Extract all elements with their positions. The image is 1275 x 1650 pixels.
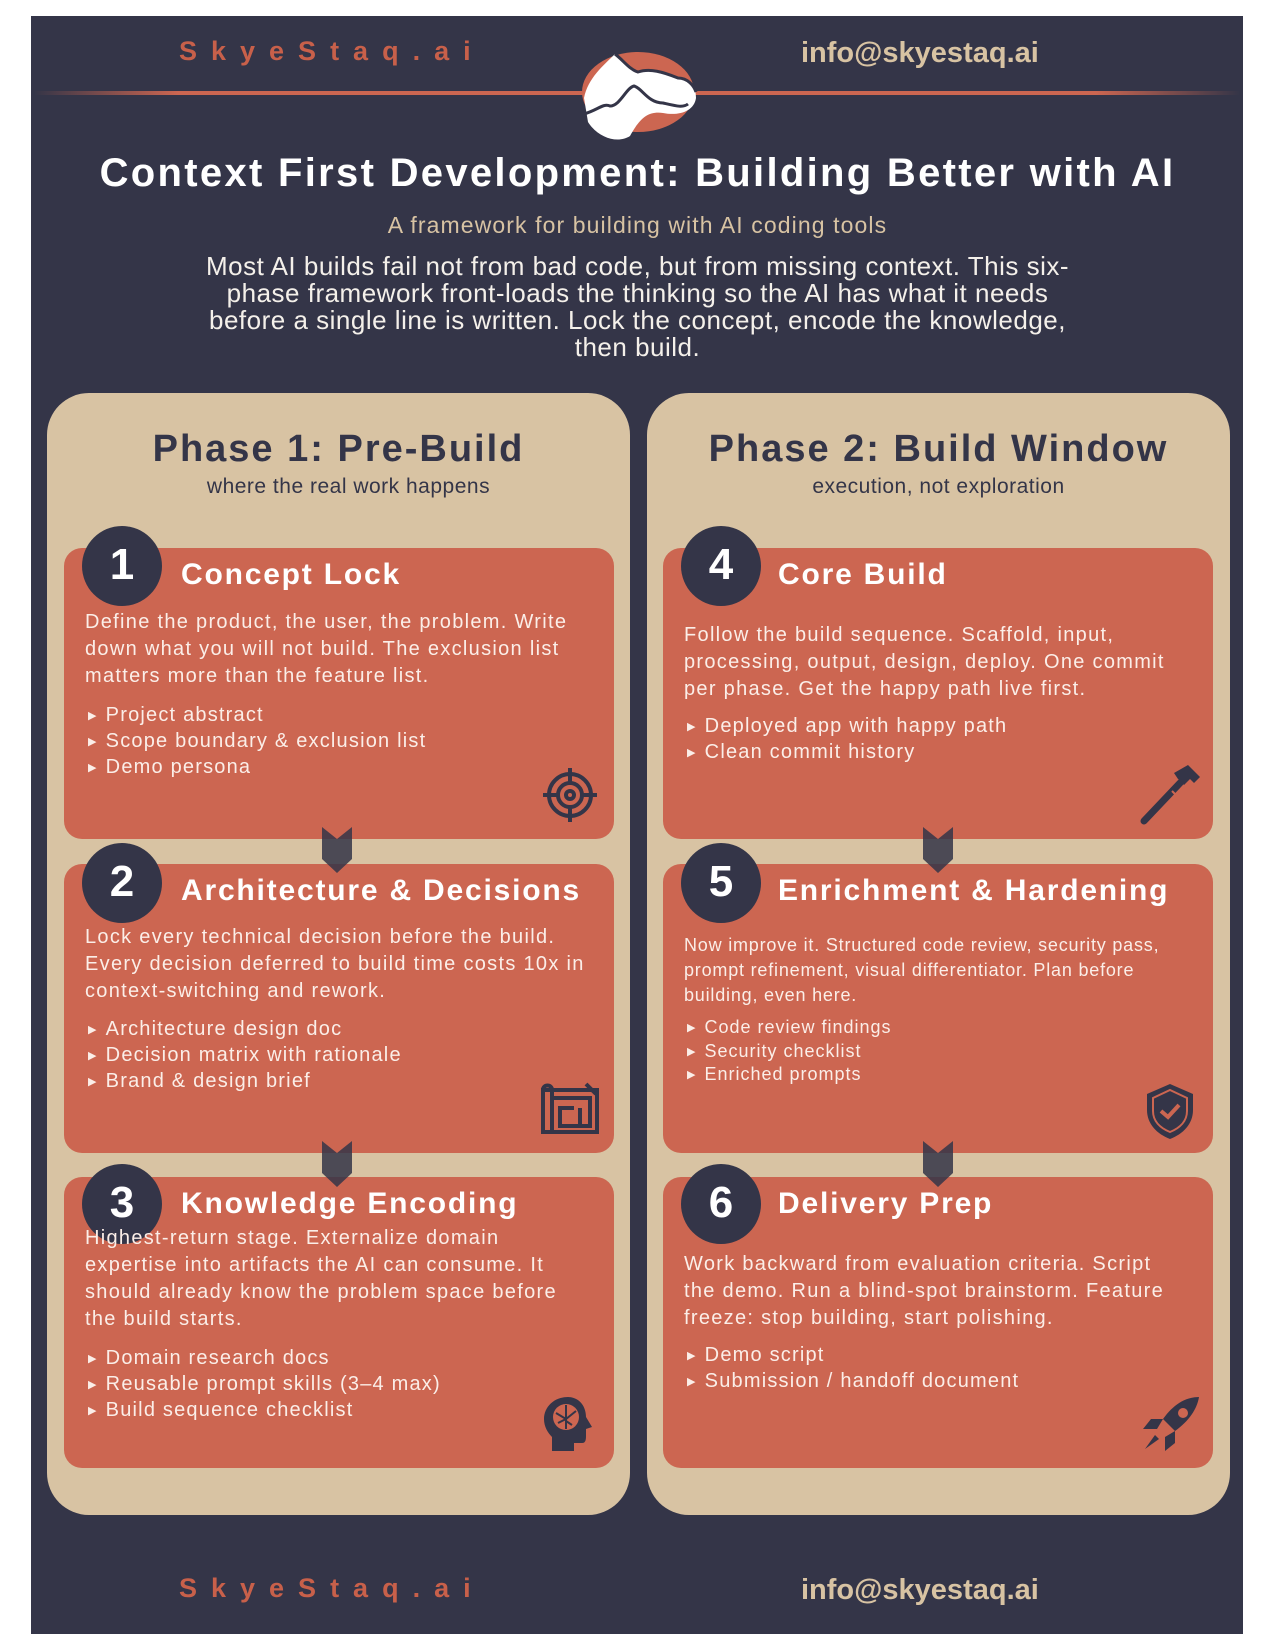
body 4 [684, 624, 1165, 700]
circle 2: 2 [110, 857, 134, 906]
body 1 [85, 611, 567, 687]
card 4 [663, 548, 1213, 839]
bullets 5: ▶ Code review findings [687, 1017, 892, 1037]
body 3 [85, 1227, 557, 1330]
intro paragraph: before a single line is written. Lock the concept, encode the knowledge, [209, 305, 1066, 335]
bullets 2: ▶ Brand & design brief [88, 1070, 311, 1092]
phase 1 title: Phase 1: Pre-Build [153, 428, 524, 470]
phase 1 subtitle: where the real work happens [207, 475, 490, 498]
icon: shield [1147, 1084, 1193, 1139]
intro paragraph [206, 251, 1069, 362]
body 2: context-switching and rework. [85, 980, 386, 1002]
bullets 6: ▶ Demo script [687, 1344, 825, 1366]
body 2: Lock every technical decision before the build. [85, 926, 555, 948]
body 3: the build starts. [85, 1308, 243, 1330]
bullets 1: ▶ Demo persona [88, 756, 251, 778]
card 5 [663, 864, 1213, 1153]
icon: rocket [1143, 1397, 1199, 1451]
body 2 [85, 926, 585, 1002]
icon: blueprint [541, 1082, 599, 1134]
panel: phase 2 [647, 393, 1230, 1515]
circle 5: 5 [709, 857, 733, 906]
body 6: Work backward from evaluation criteria. Script [684, 1253, 1151, 1275]
body 4: per phase. Get the happy path live first. [684, 678, 1086, 700]
body 1: down what you will not build. The exclusion list [85, 638, 559, 660]
circle 2 [82, 843, 162, 923]
icon: brain head [544, 1397, 592, 1451]
circle 1: 1 [110, 540, 134, 589]
card 1 [64, 548, 614, 839]
body 5 [684, 935, 1159, 1005]
card 6 [663, 1177, 1213, 1468]
bullets 2 [88, 1018, 402, 1092]
body 3: should already know the problem space before [85, 1281, 557, 1303]
body 5: Now improve it. Structured code review, security pass, [684, 935, 1159, 955]
body 1: Define the product, the user, the problem. Write [85, 611, 567, 633]
bullets 1: ▶ Scope boundary & exclusion list [88, 730, 426, 752]
arrow: 1 to 2 [322, 827, 352, 873]
phase 2 title: Phase 2: Build Window [709, 428, 1168, 470]
bullets 2: ▶ Architecture design doc [88, 1018, 342, 1040]
title 6: Delivery Prep [778, 1187, 993, 1220]
circle 3: 3 [110, 1178, 134, 1227]
card 3 [64, 1177, 614, 1468]
body 5: building, even here. [684, 985, 857, 1005]
header brand: SkyeStaq.ai [179, 36, 485, 66]
intro paragraph: phase framework front-loads the thinking so the AI has what it needs [227, 278, 1048, 308]
body 6: freeze: stop building, start polishing. [684, 1307, 1054, 1329]
header line [34, 91, 1240, 95]
subtitle: A framework for building with AI coding tools [388, 212, 887, 238]
body 1: matters more than the feature list. [85, 665, 430, 687]
circle 5 [681, 843, 761, 923]
bullets 3 [88, 1347, 441, 1421]
bullets 6 [687, 1344, 1019, 1392]
bullets 6: ▶ Submission / handoff document [687, 1370, 1019, 1392]
body 6 [684, 1253, 1164, 1329]
card 2 [64, 864, 614, 1153]
arrow: 5 to 6 [923, 1141, 953, 1187]
header email: info@skyestaq.ai [801, 37, 1039, 69]
logo [582, 52, 698, 140]
bullets 5: ▶ Security checklist [687, 1040, 862, 1060]
bullets 4: ▶ Deployed app with happy path [687, 715, 1007, 737]
title 2: Architecture & Decisions [181, 874, 581, 907]
bullets 4 [687, 715, 1007, 763]
bullets 2: ▶ Decision matrix with rationale [88, 1044, 402, 1066]
title: Context First Development: Building Better with AI [100, 151, 1175, 195]
bullets 5 [687, 1017, 892, 1084]
intro paragraph: Most AI builds fail not from bad code, but from missing context. This six- [206, 251, 1069, 281]
title 3: Knowledge Encoding [181, 1187, 518, 1220]
bullets 4: ▶ Clean commit history [687, 741, 915, 763]
intro paragraph: then build. [575, 332, 700, 362]
circle 1 [82, 526, 162, 606]
title 1: Concept Lock [181, 558, 401, 591]
phase 2 subtitle: execution, not exploration [812, 475, 1065, 498]
bullets 3: ▶ Build sequence checklist [88, 1399, 354, 1421]
body 4: processing, output, design, deploy. One commit [684, 651, 1165, 673]
circle 4: 4 [709, 540, 733, 589]
circle 3 [82, 1164, 162, 1244]
body 6: the demo. Run a blind-spot brainstorm. Feature [684, 1280, 1164, 1302]
bullets 3: ▶ Reusable prompt skills (3–4 max) [88, 1373, 441, 1395]
arrow: 4 to 5 [923, 827, 953, 873]
bullets 1: ▶ Project abstract [88, 704, 264, 726]
panel: phase 1 [47, 393, 630, 1515]
footer brand: SkyeStaq.ai [179, 1573, 485, 1603]
bullets 1 [88, 704, 426, 778]
body 2: Every decision deferred to build time costs 10x in [85, 953, 585, 975]
circle 4 [681, 526, 761, 606]
icon: target [543, 768, 597, 822]
body 4: Follow the build sequence. Scaffold, input, [684, 624, 1114, 646]
icon: hammer [1140, 765, 1200, 824]
body 5: prompt refinement, visual differentiator. Plan before [684, 960, 1134, 980]
circle 6 [681, 1164, 761, 1244]
bullets 3: ▶ Domain research docs [88, 1347, 330, 1369]
title 5: Enrichment & Hardening [778, 874, 1169, 907]
body 3: expertise into artifacts the AI can consume. It [85, 1254, 544, 1276]
circle 6: 6 [709, 1178, 733, 1227]
bullets 5: ▶ Enriched prompts [687, 1064, 862, 1084]
body 3: Highest-return stage. Externalize domain [85, 1227, 499, 1249]
footer email: info@skyestaq.ai [801, 1574, 1039, 1606]
title 4: Core Build [778, 558, 948, 591]
arrow: 2 to 3 [322, 1141, 352, 1187]
